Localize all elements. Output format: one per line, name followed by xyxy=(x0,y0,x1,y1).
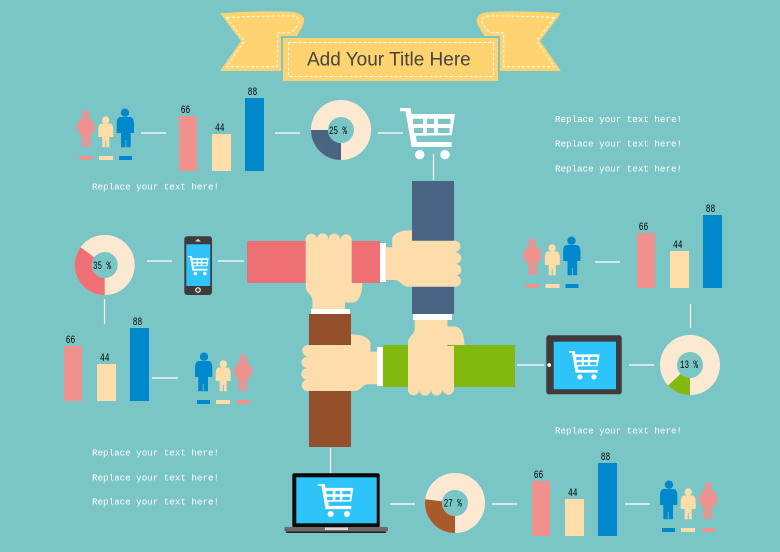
text block: bottom left xyxy=(92,448,219,508)
bar chart: right: 44 xyxy=(673,240,683,252)
bar chart: left: 44 xyxy=(100,353,110,365)
text block: top right: Replace your text here! xyxy=(555,114,682,125)
people icons: top left xyxy=(76,108,134,160)
bar chart: left xyxy=(64,317,149,401)
donut chart: 13% xyxy=(668,344,712,386)
text block: bottom left: Replace your text here! xyxy=(92,472,219,484)
text: right: Replace your text here! xyxy=(555,426,682,436)
text block: top right: Replace your text here! xyxy=(555,138,682,150)
arm: red sleeve xyxy=(247,241,386,283)
ribbon: right xyxy=(477,11,561,71)
icon: shopping cart xyxy=(400,108,455,159)
title banner xyxy=(220,11,561,81)
bar chart: top left: 66 xyxy=(181,105,190,117)
text block: bottom left: Replace your text here! xyxy=(92,496,219,508)
icon: phone xyxy=(184,236,212,295)
bar chart: left: 66 xyxy=(66,335,75,347)
bar chart: bottom: 44 xyxy=(568,488,578,500)
text: top left: Replace your text here! xyxy=(92,182,219,192)
arm: navy sleeve xyxy=(412,181,454,320)
title plate xyxy=(283,38,498,81)
donut chart: 27% xyxy=(434,482,476,524)
donut chart: 35%: 35 % xyxy=(93,261,111,273)
arm: green sleeve xyxy=(377,345,515,387)
bar chart: left: 88 xyxy=(133,317,142,329)
bar chart: top left xyxy=(179,87,264,171)
bar chart: right: 66 xyxy=(639,222,648,234)
bar chart: bottom: 88 xyxy=(601,452,610,464)
hands: four interlocked arms xyxy=(247,181,515,447)
donut chart: 27%: 27 % xyxy=(444,499,462,511)
connector lines xyxy=(104,133,690,504)
bar chart: right xyxy=(637,204,722,288)
bar chart: bottom: 66 xyxy=(534,470,543,482)
people icons: left xyxy=(195,352,253,404)
title: Add Your Title Here xyxy=(307,50,471,71)
donut chart: 35% xyxy=(83,244,126,286)
ribbon: left xyxy=(220,11,304,71)
bar chart: top left: 88 xyxy=(248,87,257,99)
fists xyxy=(301,233,461,396)
people icons: bottom xyxy=(660,480,718,532)
donut chart: 25% xyxy=(320,108,362,152)
bar chart: bottom xyxy=(532,452,617,536)
bar chart: right: 88 xyxy=(706,204,715,216)
text block: top right: Replace your text here! xyxy=(555,164,682,174)
donut chart: 25%: 25 % xyxy=(329,126,347,138)
thumbs xyxy=(337,230,464,360)
donut chart: 13%: 13 % xyxy=(680,360,698,372)
icon: tablet xyxy=(546,335,622,394)
icon: laptop xyxy=(284,473,388,533)
arm: brown sleeve xyxy=(309,309,351,447)
text block: top right xyxy=(555,114,682,174)
people icons: right xyxy=(522,236,580,288)
bar chart: top left: 44 xyxy=(215,123,225,135)
text block: bottom left: Replace your text here! xyxy=(92,448,219,458)
